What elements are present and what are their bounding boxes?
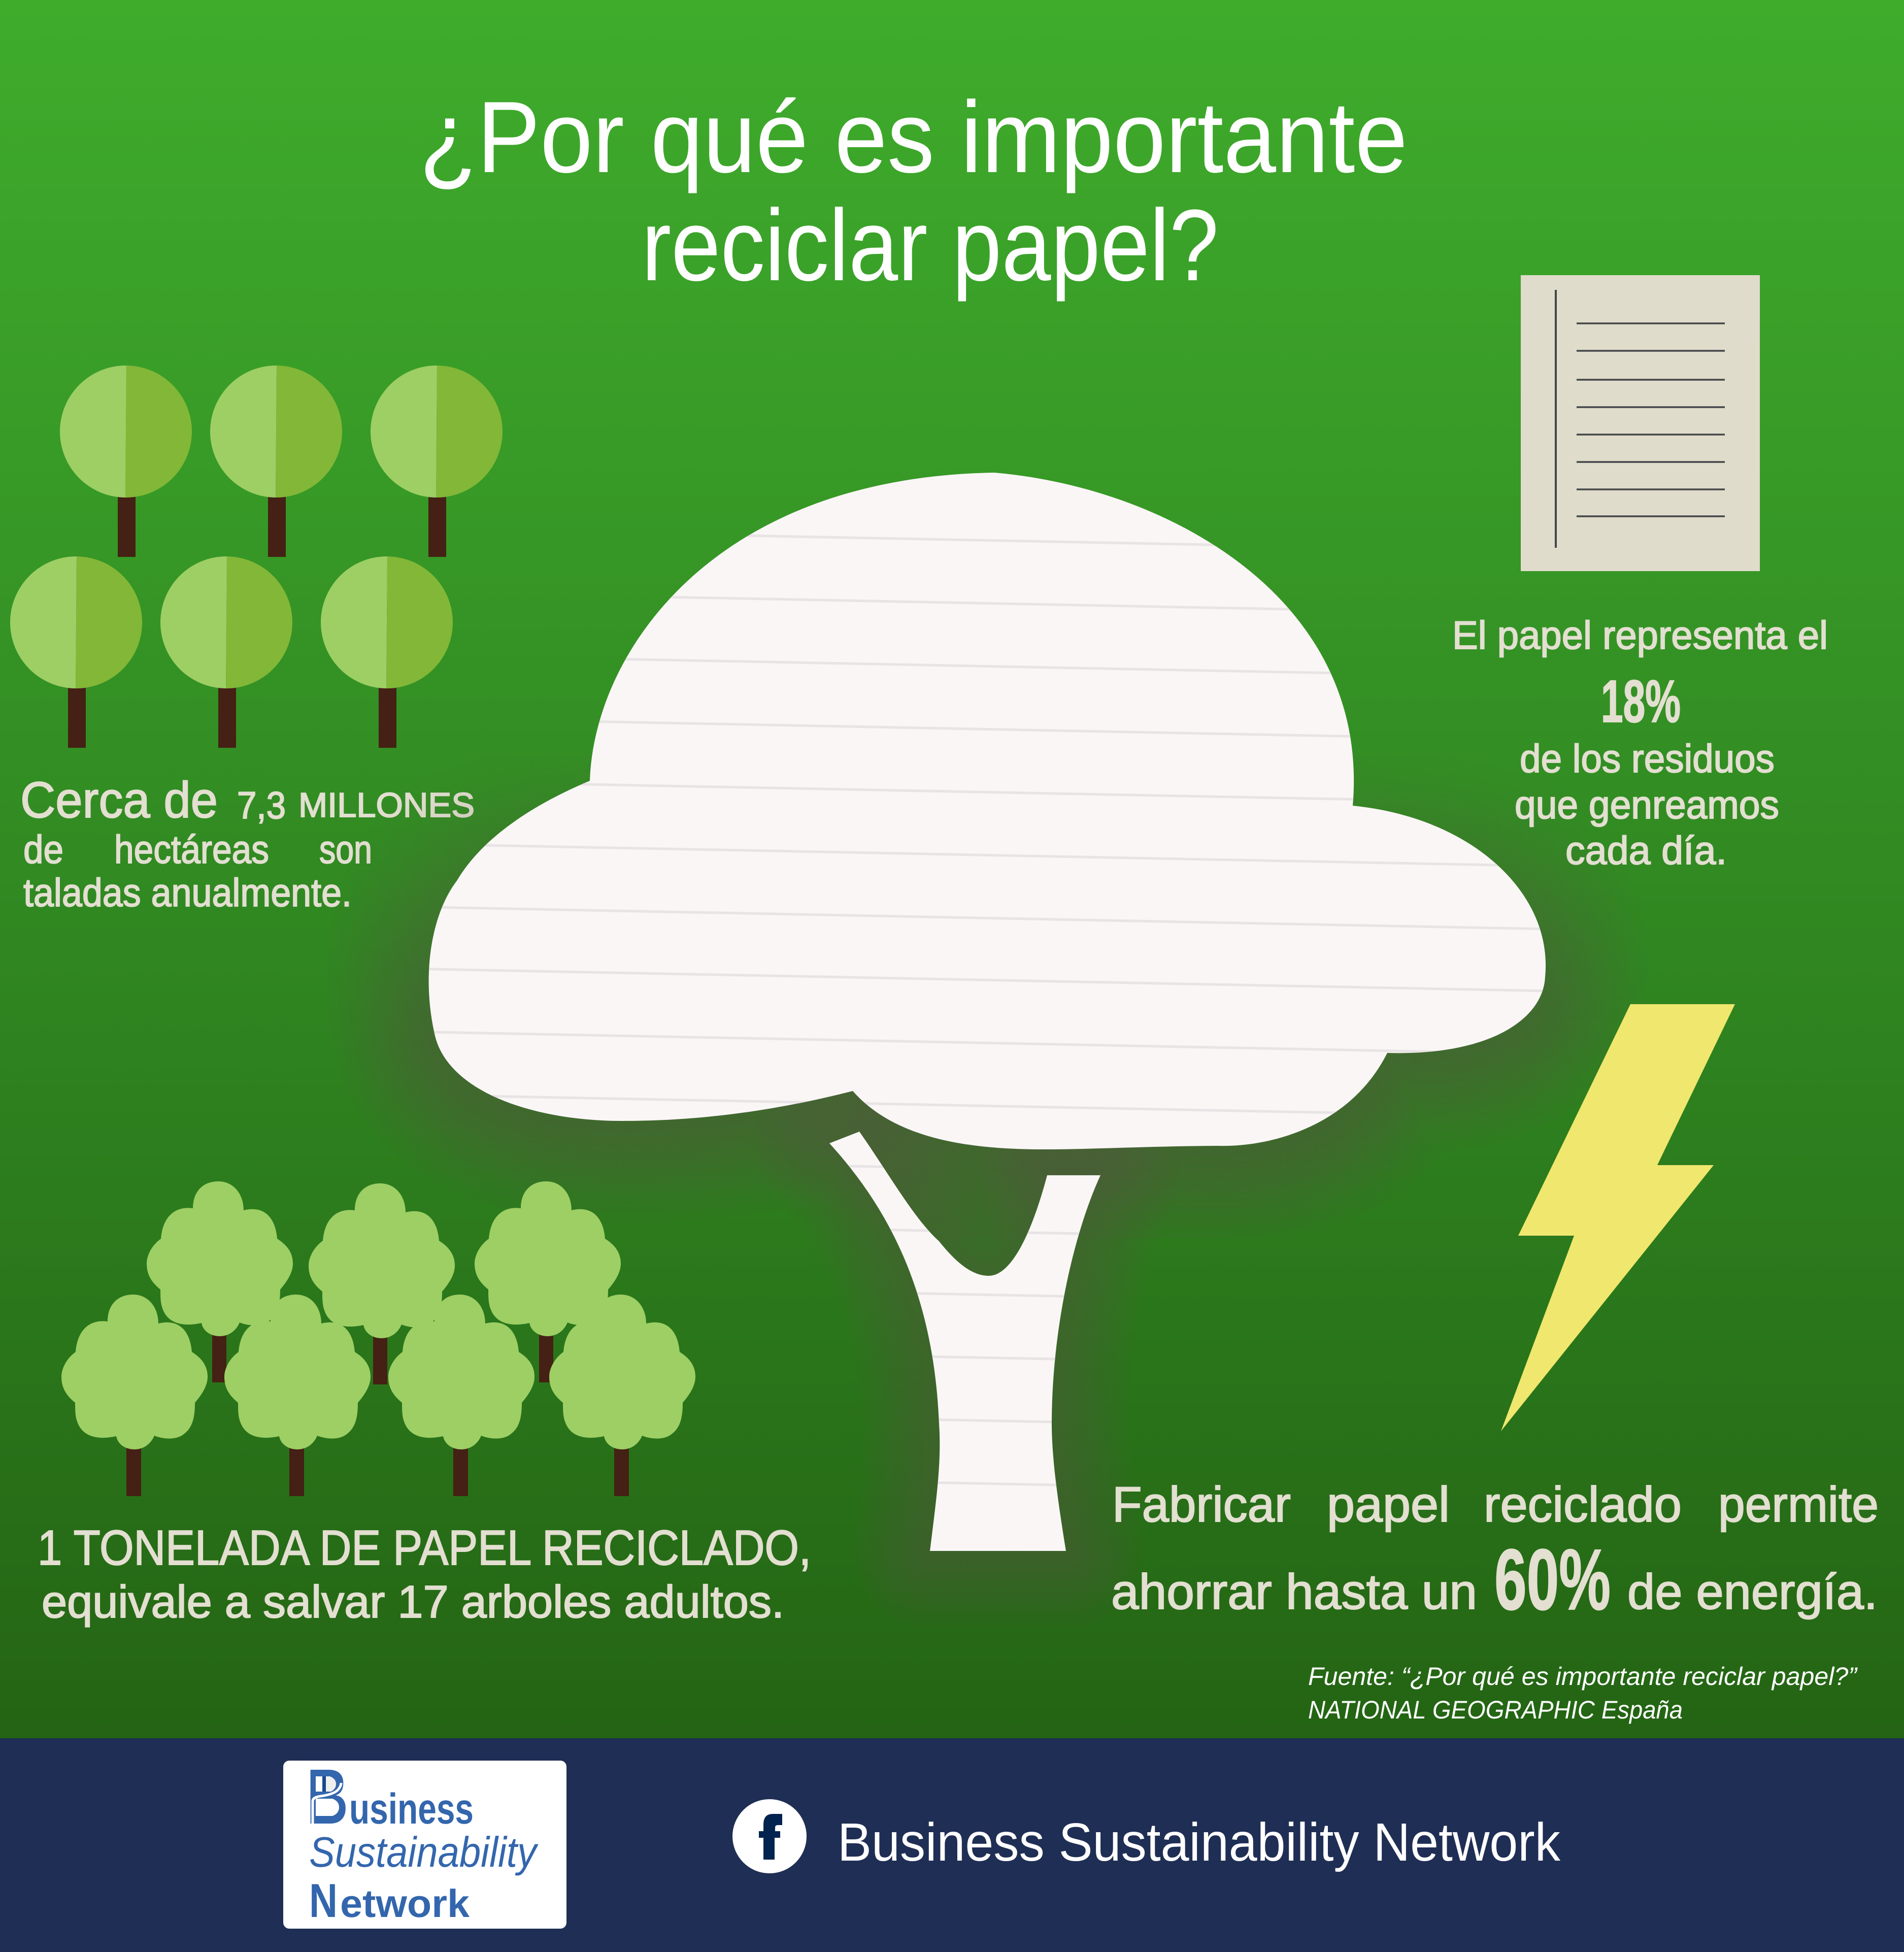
logo: Business Sustainability Network: usiness [349,1785,474,1833]
footer facebook page name: Business Sustainability Network [838,1812,1561,1872]
text: paper waste statistic: de los residuos [1520,736,1775,781]
text: paper waste statistic: que genreamos [1515,782,1779,827]
text: deforestation statistic: 7,3 [237,784,286,826]
text: energy savings statistic: permite [1718,1476,1879,1532]
text: trees saved statistic: equivale a salvar 17 arboles adultos. [42,1577,784,1628]
icon: sheet of paper [1521,275,1760,571]
text: energy savings statistic: ahorrar hasta un [1111,1564,1477,1619]
title: ¿Por qué es importante [419,81,1408,194]
text: paper waste statistic [1452,613,1828,873]
text: energy savings statistic [1111,1476,1879,1628]
text: paper waste statistic: El papel representa el [1452,613,1828,657]
source citation: Fuente: “¿Por qué es importante reciclar papel?” [1308,1662,1858,1691]
text: deforestation statistic: Cerca de [20,772,218,829]
text: deforestation statistic: MILLONES [298,786,475,824]
text: deforestation statistic: hectáreas [114,827,269,872]
panel: trees saved [38,1181,811,1628]
source citation [1308,1662,1858,1724]
logo: Business Sustainability Network: etwork [340,1882,470,1926]
text: energy savings statistic: papel [1327,1476,1450,1532]
panel: energy savings [1111,1004,1879,1628]
logo: Business Sustainability Network: Sustainability [309,1828,539,1876]
title: reciclar papel? [642,189,1219,302]
tree shadow [429,473,1546,1551]
icon: lightning bolt [1501,1004,1735,1431]
logo: Business Sustainability Network: B [307,1753,348,1840]
text: energy savings statistic: reciclado [1484,1476,1682,1532]
text: deforestation statistic: taladas anualmente. [23,870,352,915]
text: paper waste statistic: cada día. [1565,828,1727,873]
panel: deforestation [10,366,503,915]
text: paper waste statistic: 18% [1601,668,1681,735]
central paper tree [406,457,1574,1574]
logo: Business Sustainability Network [283,1753,566,1929]
text: energy savings statistic: 60% [1494,1532,1611,1628]
text: deforestation statistic: son [319,827,372,872]
logo: Business Sustainability Network: N [309,1874,338,1927]
icon: facebook [732,1799,807,1873]
footer band [0,1738,1904,1952]
text: trees saved statistic [38,1520,811,1628]
title [419,81,1408,302]
source citation: NATIONAL GEOGRAPHIC España [1308,1696,1683,1724]
text: deforestation statistic: de [23,827,63,872]
text: trees saved statistic: 1 TONELADA DE PAPEL RECICLADO, [38,1520,811,1575]
text: energy savings statistic: de energía. [1627,1564,1878,1619]
icon: seven bushy trees [61,1181,695,1496]
text: energy savings statistic: Fabricar [1112,1476,1291,1532]
icon: six round trees [10,366,503,748]
tree crown and trunk in lined paper [406,457,1574,1574]
panel: paper waste [1452,275,1828,873]
text: deforestation statistic [20,772,475,915]
